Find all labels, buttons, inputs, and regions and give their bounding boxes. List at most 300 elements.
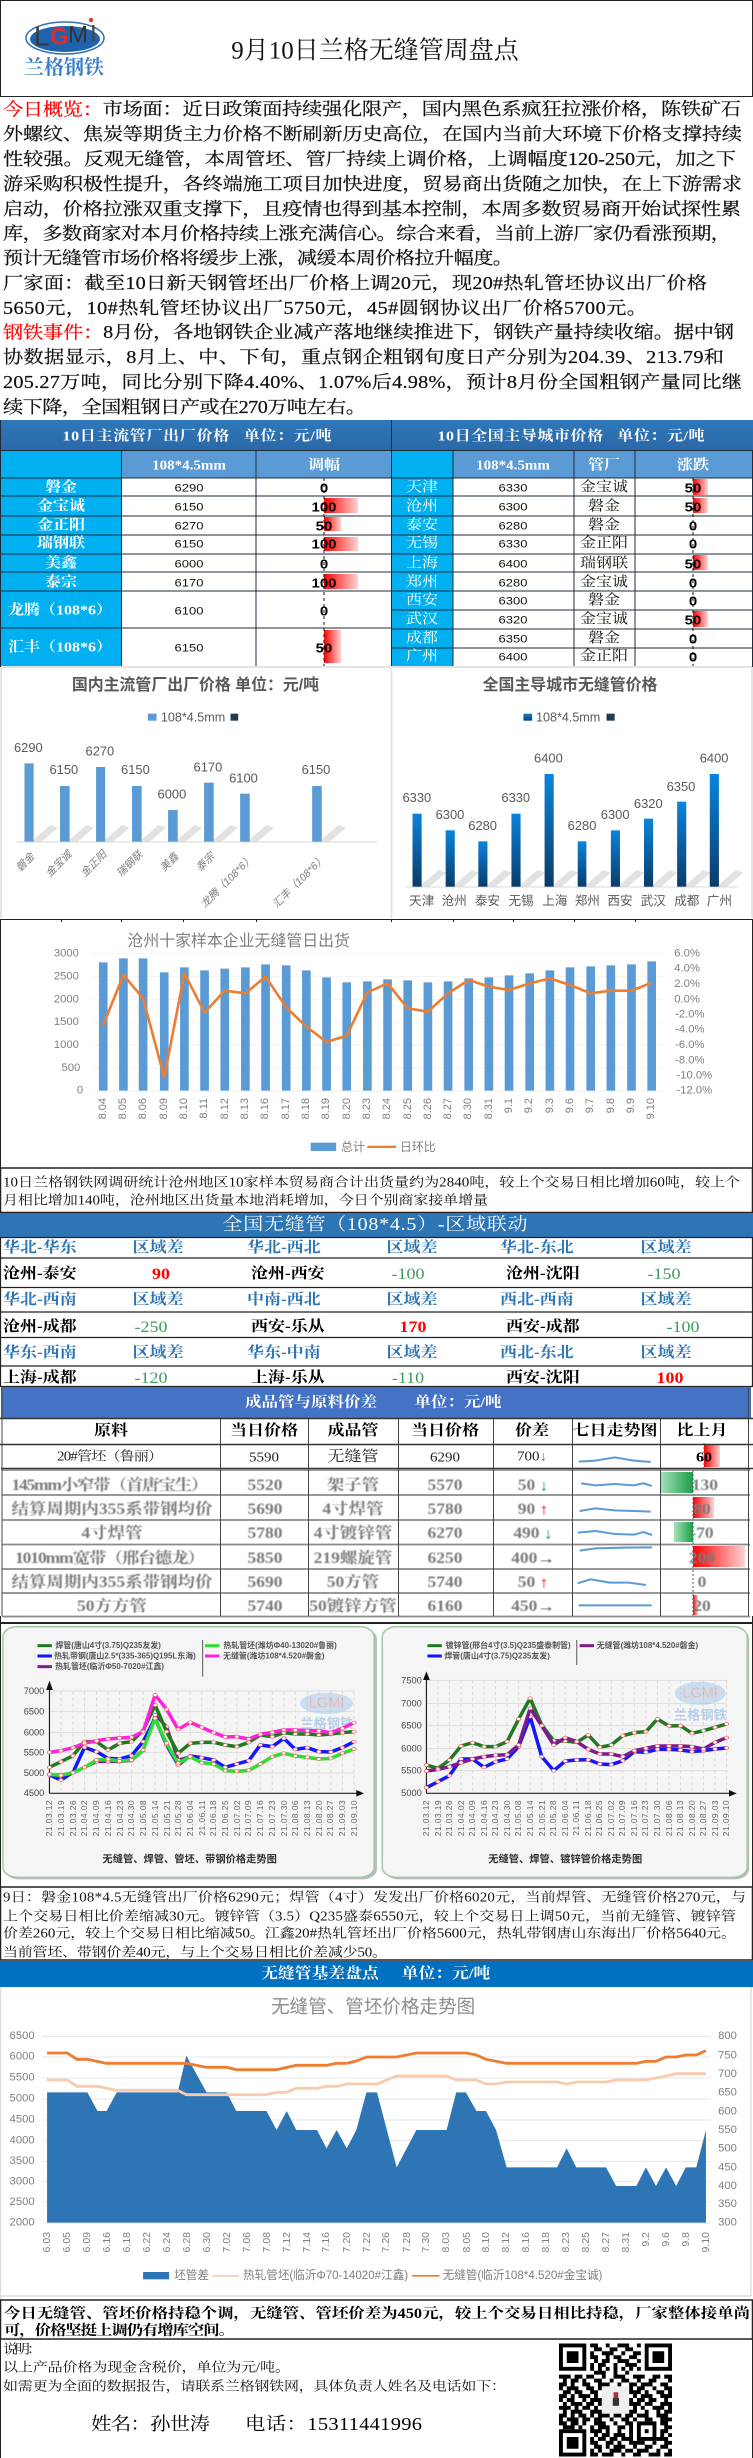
legend xyxy=(143,2268,603,2282)
axis dates: 6.24 xyxy=(161,2232,173,2252)
right axis xyxy=(674,947,712,1097)
blurred data rows: 5690 xyxy=(248,1573,282,1591)
axis dates: 7.20 xyxy=(341,2232,353,2252)
table: city names: 泰安 xyxy=(406,518,438,533)
axis dates: 8.27 xyxy=(600,2232,612,2252)
chart: city prices: 6330 xyxy=(501,790,530,805)
heading xyxy=(245,1393,502,1411)
chart: mill prices: 6150 xyxy=(121,762,150,777)
table: city mills: 金宝诚 xyxy=(580,480,628,495)
axis dates xyxy=(97,1098,657,1119)
blurred data rows: 结算周期内355系带钢均价 xyxy=(11,1500,213,1518)
left axis: 3000 xyxy=(10,2175,35,2187)
right chart dates: 21.06.25 xyxy=(594,1800,604,1836)
left chart dates: 21.06.18 xyxy=(208,1800,218,1836)
city pair labels: 西安-沈阳 xyxy=(506,1369,580,1386)
axis dates: 7.14 xyxy=(301,2232,313,2252)
region pair labels: 区域差 xyxy=(133,1343,183,1361)
logo: LGMI: 兰格钢铁 xyxy=(24,56,104,79)
axis dates: 9.9 xyxy=(625,1098,637,1113)
city pair labels: 上海-乐从 xyxy=(251,1369,325,1386)
legend: 热轧管坯(临沂Φ50-7020#江鑫) xyxy=(55,1661,164,1671)
axis dates: 9.10 xyxy=(700,2232,712,2252)
right axis: 4.0% xyxy=(674,963,700,975)
axis dates: 8.23 xyxy=(560,2232,572,2252)
axis dates: 9.3 xyxy=(544,1098,556,1113)
region pair labels: 区域差 xyxy=(133,1238,183,1256)
table: city values: 6280 xyxy=(499,519,528,533)
market overview text: 续下降，全国粗钢日产或在270万吨左右。 xyxy=(3,397,366,418)
chart: mill prices: 108*4.5mm xyxy=(161,710,225,724)
chart: mill prices: 6270 xyxy=(86,743,114,759)
text: welded and galvanized pipe note: 价差260元，较上个交易日相比缩减50。江鑫20#热轧管坯出厂价格5600元，热轧带钢唐山东海出厂价格5640元。 xyxy=(3,1926,736,1941)
left axis: 0 xyxy=(77,1085,83,1097)
table: city mills: 金正阳 xyxy=(580,536,628,551)
legend: 坯管差 xyxy=(174,2268,209,2282)
text: Cangzhou shipments note: 10日兰格钢铁网调研统计沧州地区10家样本贸易商合计出货量约为2840吨，较上个交易日相比增加60吨，较上个 xyxy=(3,1175,740,1190)
left axis: 4500 xyxy=(10,2114,35,2126)
axis dates: 8.10 xyxy=(480,2232,492,2252)
axis dates: 7.08 xyxy=(261,2232,273,2252)
table: city change: 50 xyxy=(685,500,701,514)
left axis: 6500 xyxy=(10,2030,35,2042)
axis dates: 8.16 xyxy=(259,1098,271,1119)
blurred data rows: 6160 xyxy=(428,1597,462,1615)
table: mill values: 6290 xyxy=(175,481,204,495)
spread values: 100 xyxy=(657,1369,683,1387)
city pair labels: 上海-成都 xyxy=(3,1368,77,1386)
left chart dates: 21.08.27 xyxy=(325,1800,335,1836)
right chart dates: 21.07.30 xyxy=(652,1800,662,1836)
blurred data rows: 4寸焊管 xyxy=(81,1524,143,1542)
left chart dates: 21.05.21 xyxy=(162,1800,172,1836)
market overview text xyxy=(3,99,742,418)
table headers: 成品管 xyxy=(328,1421,378,1439)
left chart dates: 21.08.06 xyxy=(290,1800,300,1836)
chart: seamless, welded, galvanized prices xyxy=(382,1627,749,1879)
watermark: LGMI xyxy=(682,1685,718,1701)
text: Cangzhou shipments note xyxy=(0,1168,752,1212)
y axis labels: 5500 xyxy=(401,1766,422,1776)
table headers: 调幅 xyxy=(308,457,340,473)
table: mill values: 6150 xyxy=(175,500,204,514)
market overview text: 协数据显示，8月上、中、下旬，重点钢企粗钢旬度日产分别为204.39、213.79和 xyxy=(3,347,724,368)
axis dates: 8.06 xyxy=(137,1098,149,1119)
legend: 焊管(唐山4寸(3.75)Q235友发) xyxy=(55,1640,161,1650)
right chart dates: 21.03.12 xyxy=(421,1800,431,1836)
right axis: 0.0% xyxy=(674,993,700,1005)
table: mill change: 50 xyxy=(316,641,332,655)
region pair labels: 西北-东北 xyxy=(500,1343,574,1361)
left axis: 5500 xyxy=(10,2072,35,2084)
chart: city prices: 108*4.5mm xyxy=(536,710,600,724)
right chart dates: 21.07.02 xyxy=(606,1800,616,1836)
axis dates: 7.06 xyxy=(241,2232,253,2252)
table: city change: 0 xyxy=(689,519,697,533)
right axis: 2.0% xyxy=(674,978,700,990)
table: mill change: 0 xyxy=(320,604,328,618)
chart: city prices: 天津 xyxy=(409,894,435,908)
right axis: 650 xyxy=(718,2087,737,2099)
right axis: 350 xyxy=(718,2198,737,2210)
chart: city prices: 6300 xyxy=(601,807,630,822)
blurred data rows: 50镀锌方管 xyxy=(309,1597,397,1615)
plot grid xyxy=(61,1692,354,1793)
axis dates: 6.16 xyxy=(101,2232,113,2252)
text: welded and galvanized pipe note: 9日：磐金108*4.5无缝管出厂价格6290元；焊管（4寸）发发出厂价格6020元，当前焊管、无缝管价格270元，与 xyxy=(3,1890,746,1905)
right chart dates: 21.05.28 xyxy=(548,1800,558,1836)
table: mill change: 100 xyxy=(312,537,337,551)
panel: raw material vs finished pipe spread table xyxy=(0,1387,753,1616)
line: seamless pipe xyxy=(47,2051,706,2070)
market overview text: 厂家面：截至10日新天钢管坯出厂价格上调20元，现20#热轧管坯协议出厂价格 xyxy=(3,273,707,294)
axis dates: 8.16 xyxy=(520,2232,532,2252)
city pair labels: 沧州-西安 xyxy=(251,1264,326,1282)
chart caption: 无缝管、焊管、管坯、带钢价格走势图 xyxy=(102,1852,277,1866)
blurred data rows xyxy=(11,1476,718,1615)
chart: city prices: 6280 xyxy=(568,818,596,833)
table headers: 管厂 xyxy=(588,457,620,473)
first data row: 5590 xyxy=(249,1451,279,1465)
watermark: 兰格钢铁 xyxy=(674,1706,728,1723)
market overview text: 钢铁事件：8月份，各地钢铁企业减产落地继续推进下，钢铁产量持续收缩。据中钢 xyxy=(3,322,734,343)
contact xyxy=(91,2414,422,2435)
table: mainstream mill names xyxy=(8,479,112,655)
area: spread xyxy=(47,2056,706,2223)
table: mainstream mill names: 磐金 xyxy=(45,479,77,495)
table: city values xyxy=(499,481,528,664)
contact: 姓名：孙世涛 xyxy=(91,2414,210,2435)
left axis: 500 xyxy=(62,1062,80,1074)
spread values: -120 xyxy=(135,1369,167,1387)
market overview text: 5650元，10#热轧管坯协议出厂5750元，45#圆钢协议出厂价格5700元。 xyxy=(3,298,647,319)
table: city values: 6300 xyxy=(499,594,528,608)
table: mainstream mill names: 金宝诚 xyxy=(37,498,85,514)
axis dates: 7.28 xyxy=(401,2232,413,2252)
blurred data rows: 5690 xyxy=(248,1500,282,1518)
right axis: 700 xyxy=(718,2068,737,2080)
table headers: 108*4.5mm xyxy=(152,459,226,473)
chart: city prices: 广州 xyxy=(707,894,732,908)
left chart dates: 21.09.10 xyxy=(349,1800,359,1836)
table: mill values: 6150 xyxy=(175,537,204,551)
axis dates: 7.16 xyxy=(320,2232,332,2252)
left axis: 2500 xyxy=(10,2196,35,2208)
panel: bar charts xyxy=(0,667,753,922)
spread values: 90 xyxy=(152,1265,170,1283)
panel: Cangzhou daily shipments chart xyxy=(0,920,752,1168)
blurred data rows: 4寸镀锌管 xyxy=(314,1524,393,1542)
axis dates: 6.18 xyxy=(121,2232,133,2252)
region pair labels: 区域差 xyxy=(387,1290,437,1308)
watermark: LGMI xyxy=(309,1695,344,1711)
axis dates: 8.30 xyxy=(462,1098,474,1119)
axis dates: 8.12 xyxy=(500,2232,512,2252)
series lines xyxy=(49,1695,354,1780)
table: city change: 0 xyxy=(689,537,697,551)
blurred data rows: 450→ xyxy=(511,1597,555,1615)
y axis labels: 5500 xyxy=(24,1748,44,1758)
table: city names: 无锡 xyxy=(406,536,438,551)
seven-day sparklines xyxy=(578,1456,652,1606)
table: mainstream mill names: 汇丰（108*6） xyxy=(8,640,112,655)
left chart dates: 21.04.23 xyxy=(115,1800,125,1836)
right axis: 800 xyxy=(718,2030,737,2042)
table headers: 原料 xyxy=(94,1421,128,1439)
blurred data rows: 219螺旋管 xyxy=(314,1549,393,1567)
axis dates: 6.03 xyxy=(41,2232,53,2252)
market overview text: 今日概览：市场面：近日政策面持续强化限产，国内黑色系疯狂拉涨价格，陈铁矿石 xyxy=(3,99,741,120)
y axis labels: 6000 xyxy=(401,1744,422,1754)
legend: 无缝管(临沂108*4.520#金宝诚) xyxy=(443,2268,603,2282)
legend: 日环比 xyxy=(400,1140,436,1154)
right axis: -4.0% xyxy=(675,1024,704,1036)
axis dates: 9.6 xyxy=(660,2232,672,2247)
left chart dates: 21.03.26 xyxy=(68,1800,78,1836)
market overview text: 游采购积极性提升，各终端施工项目加快进度，贸易商出货随之加快，在上下游需求 xyxy=(3,173,742,195)
table: city names: 广州 xyxy=(406,649,438,664)
table: city names: 天津 xyxy=(406,480,438,495)
chart: mill prices: 6150 xyxy=(302,762,330,777)
left axis: 4000 xyxy=(10,2134,35,2146)
axis dates: 8.12 xyxy=(219,1098,231,1119)
logo: LGMI xyxy=(24,18,104,79)
bars: total xyxy=(99,958,656,1091)
region pair labels xyxy=(3,1238,691,1361)
watermark: 兰格钢铁 xyxy=(300,1715,354,1731)
plot grid xyxy=(438,1680,727,1793)
left axis: 5000 xyxy=(10,2093,35,2105)
chart caption: 无缝管、焊管、镀锌管价格走势图 xyxy=(488,1852,642,1866)
left chart dates: 21.07.09 xyxy=(243,1800,253,1836)
blurred data rows: 架子管 xyxy=(327,1476,380,1494)
blurred data rows: 490 ↓ xyxy=(513,1524,553,1542)
panel: notes and contact xyxy=(0,2339,752,2458)
chart: city prices: 6330 xyxy=(402,790,431,805)
axis dates: 9.1 xyxy=(503,1098,515,1113)
region pair labels: 华北-西北 xyxy=(247,1238,321,1256)
table: mill values: 6170 xyxy=(175,576,204,590)
right chart dates: 21.06.04 xyxy=(560,1800,570,1836)
chart: mill prices: 6100 xyxy=(229,770,258,786)
left chart dates: 21.04.09 xyxy=(91,1800,101,1836)
chart: city prices: 6300 xyxy=(436,807,464,822)
axis dates: 6.05 xyxy=(61,2232,73,2252)
chart: city prices: 6320 xyxy=(634,796,663,811)
table: mainstream mill names: 泰宗 xyxy=(45,574,78,590)
left chart dates: 21.08.20 xyxy=(314,1800,324,1836)
table: city values: 6320 xyxy=(499,613,528,627)
table headers xyxy=(94,1421,727,1439)
table: city mills: 磐金 xyxy=(588,593,620,608)
legend: 总计 xyxy=(341,1140,365,1154)
heading: 全国无缝管（108*4.5）-区域联动 xyxy=(222,1214,528,1235)
right chart dates: 21.06.18 xyxy=(583,1800,593,1836)
spread values xyxy=(135,1265,699,1387)
market overview text: 预计无缝管市场价格将缓步上涨，减缓本周价格拉升幅度。 xyxy=(3,248,513,269)
chart: mill rotated axis labels: 瑞钢联 xyxy=(114,848,146,880)
left axis xyxy=(10,2030,35,2229)
table: city values: 6330 xyxy=(499,537,528,551)
city pair labels: 沧州-沈阳 xyxy=(506,1264,580,1282)
panel: price tables xyxy=(0,420,753,667)
table headers: 当日价格 xyxy=(230,1421,298,1439)
city pair labels xyxy=(3,1264,580,1386)
text: welded and galvanized pipe note xyxy=(0,1887,752,1960)
axis dates: 7.02 xyxy=(221,2232,233,2252)
right chart dates: 21.03.19 xyxy=(433,1800,443,1836)
table: mill change: 100 xyxy=(312,576,337,590)
table: city mills: 金正阳 xyxy=(580,649,628,664)
text: summary note: 今日无缝管、管坯价格持稳个调，无缝管、管坯价差为450元，较上个交易日相比持稳，厂家整体接单尚 xyxy=(4,2304,750,2323)
table: city values: 6350 xyxy=(499,632,528,646)
city pair labels: 西安-乐从 xyxy=(251,1318,325,1335)
chart: seamless, welded, billet, strip prices xyxy=(3,1627,377,1879)
blurred data rows: 145mm小窄带（首唐宝生） xyxy=(12,1476,209,1494)
legend: 镀锌管(邢台4寸(3.5)Q235盛泰制管) xyxy=(446,1640,571,1650)
spread values: -100 xyxy=(392,1265,424,1283)
left chart dates: 21.07.16 xyxy=(255,1800,265,1836)
chart: city prices: 6400 xyxy=(534,750,563,766)
notes: 说明： xyxy=(3,2343,42,2357)
right axis: 400 xyxy=(718,2180,737,2192)
table: city change xyxy=(685,481,701,664)
axis dates: 9.7 xyxy=(584,1098,596,1113)
left axis: 2000 xyxy=(10,2217,35,2229)
right axis: -12.0% xyxy=(676,1085,712,1097)
notes: 如需更为全面的数据报告，请联系兰格钢铁网，具体负责人姓名及电话如下： xyxy=(3,2379,506,2394)
left axis: 1500 xyxy=(54,1016,79,1028)
table: mill change: 50 xyxy=(316,519,332,533)
chart: mill rotated axis labels: 金正阳 xyxy=(78,848,110,880)
chart: city prices: 无锡 xyxy=(508,894,534,908)
chart: mill rotated axis labels: 泰宗 xyxy=(194,850,218,874)
chart: mill rotated axis labels: 汇丰（108*6） xyxy=(271,853,328,910)
region pair labels: 华北-西南 xyxy=(3,1290,77,1308)
axis dates: 8.05 xyxy=(117,1098,129,1119)
table: mill values: 6150 xyxy=(175,641,204,655)
axis dates: 6.30 xyxy=(201,2232,213,2252)
legend: 焊管(唐山4寸(3.75)Q235友发) xyxy=(444,1650,550,1661)
right chart dates: 21.04.16 xyxy=(479,1800,489,1836)
chart: city prices: 6280 xyxy=(468,818,497,833)
text: summary note xyxy=(0,2300,752,2340)
blurred data rows: 5780 xyxy=(248,1524,282,1542)
axis dates: 8.18 xyxy=(540,2232,552,2252)
chart: city prices: 沧州 xyxy=(442,893,467,908)
heading: 单位：元/吨 xyxy=(414,1394,502,1411)
left axis: 3000 xyxy=(54,947,79,959)
legend: 无缝管(潍坊108*4.520#磐金) xyxy=(223,1650,325,1661)
first data row: 20#管坯（鲁丽） xyxy=(57,1450,163,1464)
left axis: 2500 xyxy=(54,970,79,982)
y axis labels: 6500 xyxy=(401,1721,422,1731)
table: city change: 50 xyxy=(685,557,701,571)
contact: 电话：15311441996 xyxy=(245,2414,422,2435)
left chart dates: 21.05.14 xyxy=(150,1800,160,1836)
region pair labels: 区域差 xyxy=(641,1343,691,1361)
axis dates: 8.25 xyxy=(402,1098,414,1119)
y axis labels xyxy=(401,1675,422,1798)
first data row: 无缝管 xyxy=(328,1448,378,1465)
axis dates: 8.03 xyxy=(440,2232,452,2252)
data bars xyxy=(660,1443,745,1616)
axis dates: 9.10 xyxy=(645,1098,657,1119)
blurred data rows: 90 ↑ xyxy=(518,1500,548,1518)
blurred data rows: 400→ xyxy=(511,1549,555,1567)
city pair labels: 西安-成都 xyxy=(506,1317,580,1335)
region pair labels: 区域差 xyxy=(641,1290,691,1308)
right chart dates: 21.04.30 xyxy=(502,1800,512,1836)
chart: city prices: 6400 xyxy=(700,750,728,766)
left chart dates: 21.04.16 xyxy=(103,1800,113,1836)
chart: city prices: 武汉 xyxy=(641,894,666,908)
legend xyxy=(37,1640,337,1677)
table: city names: 武汉 xyxy=(406,612,438,627)
first data row: 700↓ xyxy=(517,1450,547,1464)
chart title: 无缝管、管坯价格走势图 xyxy=(271,1996,475,2017)
legend: 无缝管(潍坊108*4.520#磐金) xyxy=(597,1640,699,1650)
blurred data rows: 50方方管 xyxy=(77,1597,148,1615)
legend: 热轧管坯(潍坊Φ40-13020#鲁丽) xyxy=(223,1640,337,1650)
left chart dates: 21.03.19 xyxy=(56,1800,66,1836)
blurred data rows: 50 ↓ xyxy=(518,1476,548,1494)
axis dates xyxy=(41,2232,712,2252)
axis dates: 7.26 xyxy=(380,2232,392,2252)
blurred data rows: 5740 xyxy=(248,1597,282,1615)
y axis labels: 5000 xyxy=(24,1768,44,1778)
line: hot rolled billet xyxy=(47,2074,706,2095)
left chart dates: 21.03.12 xyxy=(44,1800,54,1836)
chart: city prices: 成都 xyxy=(674,894,700,908)
blurred data rows: 5570 xyxy=(428,1476,462,1494)
table: city mills xyxy=(580,480,628,664)
table: mainstream mill names: 瑞钢联 xyxy=(37,535,85,551)
market overview text: 性较强。反观无缝管，本周管坯、管厂持续上调价格，上调幅度120-250元，加之下 xyxy=(3,149,736,170)
chart: mill prices: 6170 xyxy=(194,759,222,775)
title: 9月10日兰格无缝管周盘点 xyxy=(231,36,520,64)
market overview text: 外螺纹、焦炭等期货主力价格不断刷新历史高位，在国内当前大环境下价格支撑持续 xyxy=(3,124,742,145)
watermark xyxy=(300,1693,354,1731)
chart: mill prices: 6290 xyxy=(14,740,43,755)
right chart dates: 21.08.13 xyxy=(675,1800,685,1836)
blurred data rows: 6250 xyxy=(428,1549,462,1567)
left chart dates: 21.06.04 xyxy=(185,1800,195,1836)
axis dates: 8.20 xyxy=(341,1098,353,1119)
left chart dates xyxy=(44,1800,359,1836)
table: city names: 西安 xyxy=(406,593,438,608)
table: city names: 沧州 xyxy=(406,499,438,514)
blurred data rows: 80 xyxy=(693,1500,711,1518)
spread values: -110 xyxy=(392,1369,424,1387)
right axis: -8.0% xyxy=(675,1054,704,1066)
axis dates: 9.2 xyxy=(640,2232,652,2247)
icon: QR code xyxy=(559,2344,672,2456)
chart: mill prices xyxy=(14,675,377,842)
legend xyxy=(427,1640,699,1665)
blurred data rows: 5740 xyxy=(428,1573,462,1591)
chart: city prices: 泰安 xyxy=(475,894,500,908)
axis dates: 8.04 xyxy=(97,1098,109,1119)
blurred data rows: 结算周期内355系带钢均价 xyxy=(11,1573,213,1591)
text: welded and galvanized pipe note: 当前管坯、带钢价差40元，与上个交易日相比价差减少50。 xyxy=(3,1945,387,1960)
right chart dates: 21.09.10 xyxy=(721,1800,731,1836)
chart: mill rotated axis labels xyxy=(14,848,328,910)
right chart dates: 21.09.03 xyxy=(710,1800,720,1836)
table: mill change xyxy=(312,481,337,655)
legend: 热轧管坯(临沂Φ70-14020#江鑫) xyxy=(243,2268,408,2282)
right axis: 500 xyxy=(718,2142,737,2154)
